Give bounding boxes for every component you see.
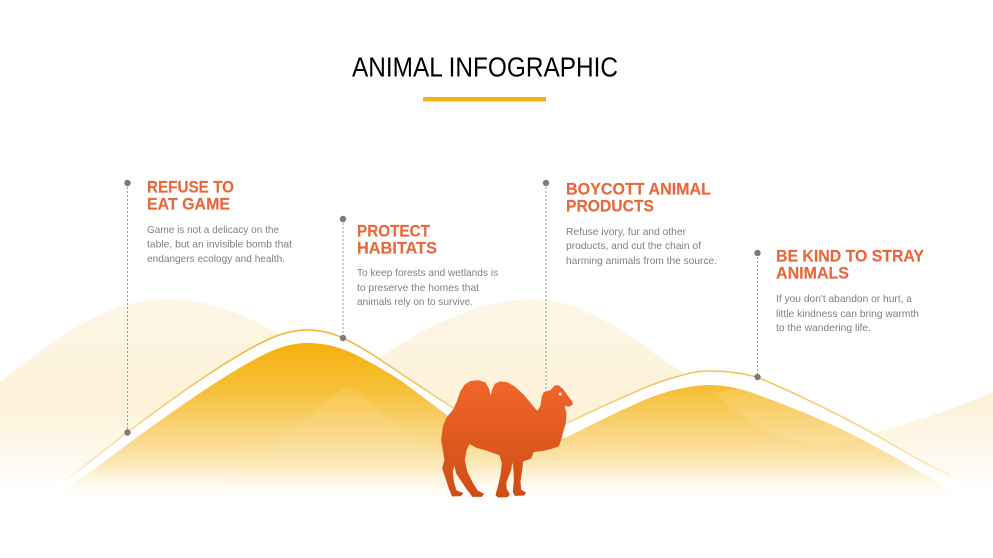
leader dot top 2 [340,216,346,222]
body text 3: harming animals from the source. [566,255,717,267]
body text 4 [776,293,919,334]
translucent back dune overlay on right hump [713,388,867,443]
body text 2: To keep forests and wetlands is [357,267,498,279]
body text 4: little kindness can bring warmth [776,308,919,320]
leader dot bottom 4 [754,374,761,380]
heading 3: PRODUCTS [566,196,654,216]
ridge line [70,330,950,477]
item 2: protect habitats [340,216,498,341]
back dune left [0,299,320,505]
body text 1: table, but an invisible bomb that [147,238,292,250]
body text 2: animals rely on to survive. [357,296,473,308]
leader dot top 3 [543,180,549,186]
leader dot bottom 2 [340,335,346,341]
icon: camel silhouette [442,381,572,497]
heading 4: ANIMALS [776,264,849,282]
body text 1: endangers ecology and health. [147,253,285,265]
body text 3: products, and cut the chain of [566,240,701,252]
leader dot top 1 [124,180,131,186]
leader dot bottom 1 [124,429,131,436]
heading 4 [776,246,925,282]
title: ANIMAL INFOGRAPHIC [352,52,618,82]
dashed leader 3 [545,183,547,392]
dashed leader 1 [126,183,128,432]
heading 2: PROTECT [357,222,431,240]
heading 2: HABITATS [357,238,437,258]
title underline [423,97,546,102]
dashed leader 2 [342,219,344,338]
front dune [52,343,975,503]
body text 4: to the wandering life. [776,322,871,334]
body text 2 [357,267,498,308]
heading 3: BOYCOTT ANIMAL [566,180,711,198]
heading 4: BE KIND TO STRAY [776,246,925,266]
body text 1: Game is not a delicacy on the [147,224,279,236]
body text 1 [147,224,292,265]
item 4: be kind to stray animals [754,246,925,380]
dashed leader 4 [756,253,758,377]
heading 2 [357,222,437,258]
item 3: boycott animal products [543,180,717,392]
bottom fade [0,465,993,510]
heading 3 [566,180,711,216]
item 1: refuse to eat game [124,178,292,436]
heading 1 [147,178,234,214]
white halo under ridge [55,330,975,505]
chart: desert dunes [0,299,993,510]
body text 2: to preserve the homes that [357,282,479,294]
body text 3: Refuse ivory, fur and other [566,226,686,238]
heading 1: REFUSE TO [147,178,234,196]
back dune right [330,299,993,505]
translucent back dune overlay on left hump [200,385,447,503]
heading 1: EAT GAME [147,194,230,214]
body text 3 [566,226,717,267]
body text 4: If you don't abandon or hurt, a [776,293,912,305]
camel eye [559,392,562,395]
leader dot top 4 [754,250,761,256]
